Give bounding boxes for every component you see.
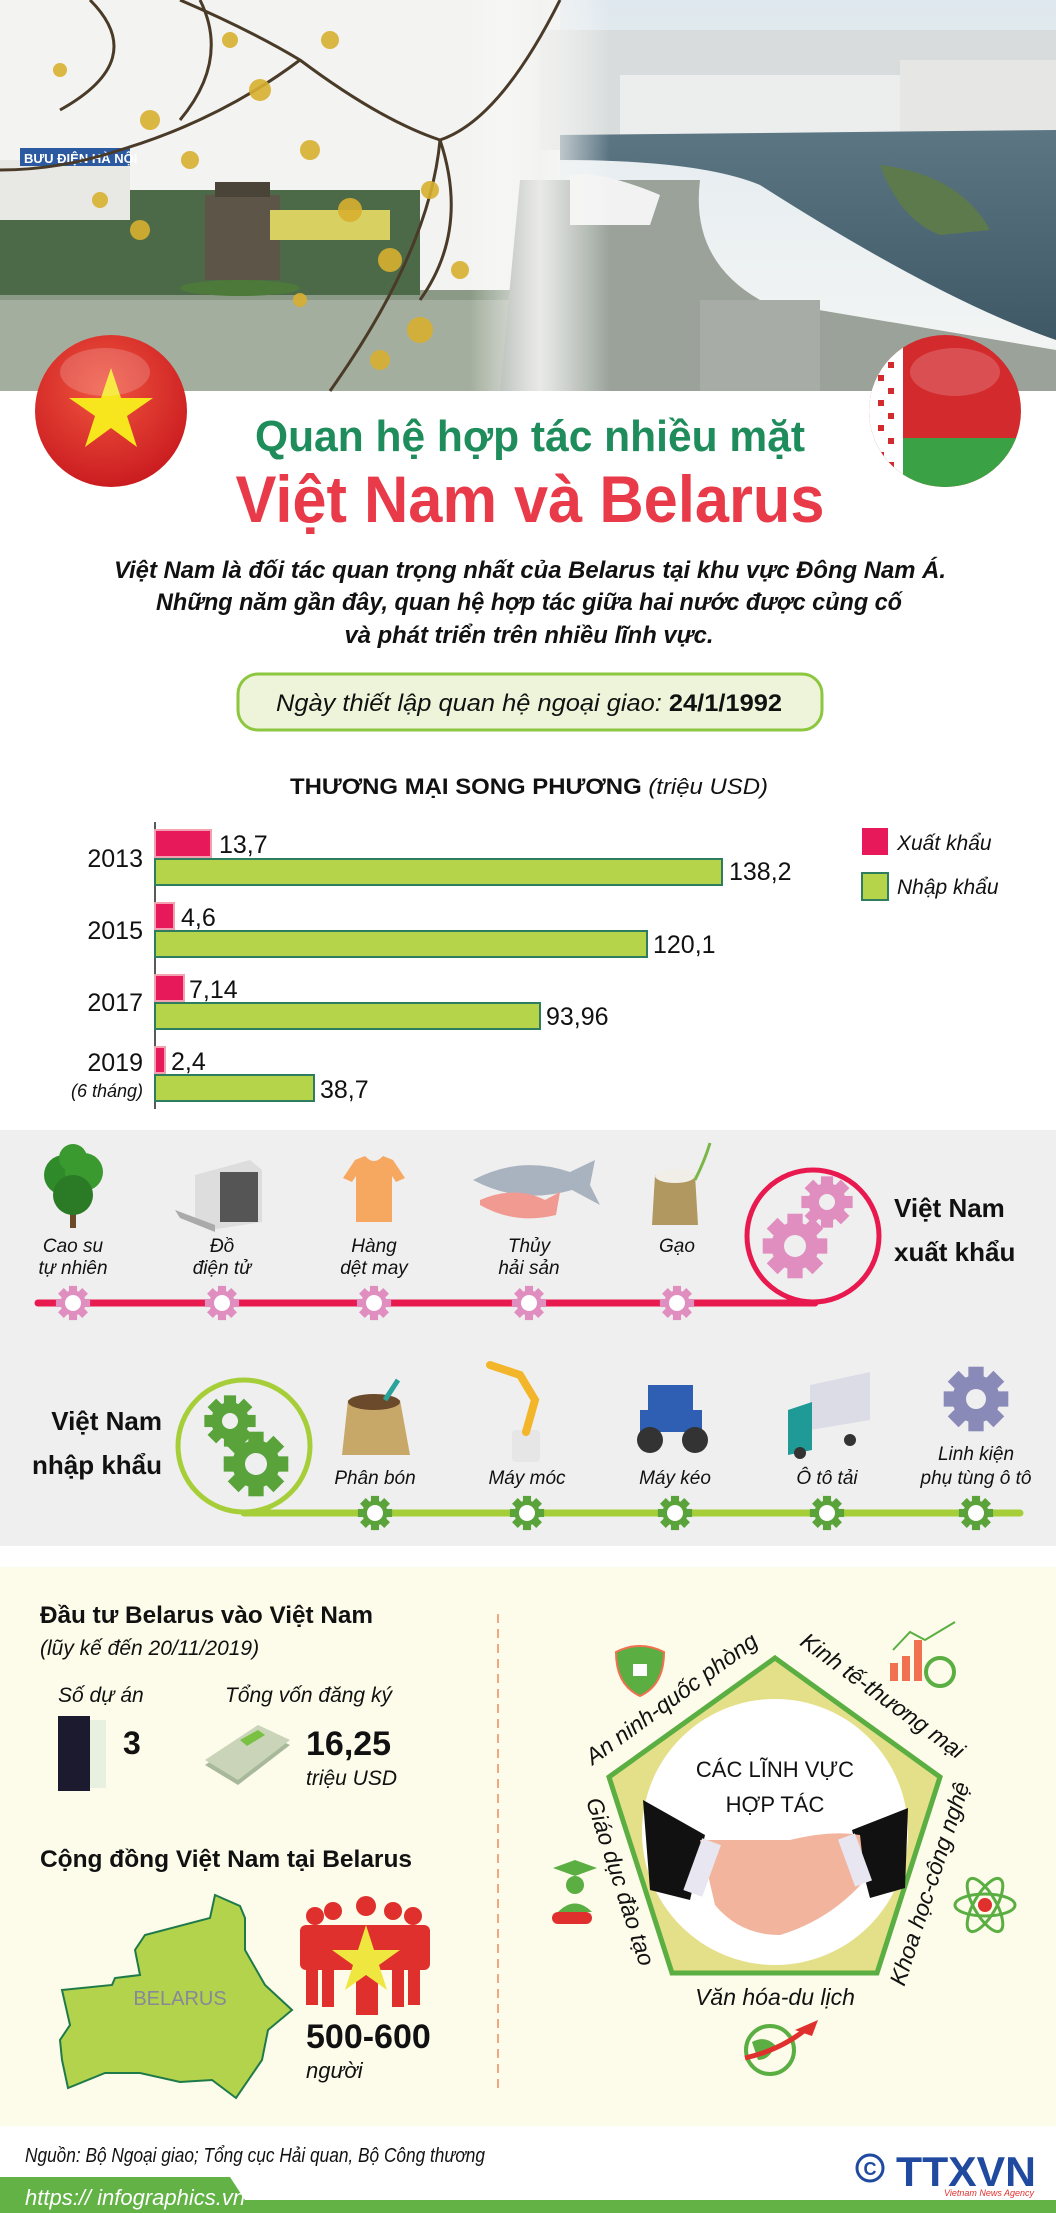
- export labels: Thủy: [508, 1236, 552, 1257]
- bar chart: 7,14: [189, 976, 238, 1004]
- import labels: phụ tùng ô tô: [920, 1468, 1032, 1489]
- export labels: Gạo: [659, 1236, 695, 1257]
- pentagon: cooperation fields: HỢP TÁC: [726, 1792, 824, 1817]
- stat: projects: Số dự án: [58, 1684, 144, 1707]
- icon: Belarus flag: [869, 335, 1021, 488]
- date box: Ngày thiết lập quan hệ ngoại giao: 24/1/1992: [276, 690, 782, 717]
- bar chart: 2019: [87, 1049, 143, 1077]
- export labels: Hàng: [351, 1236, 397, 1257]
- export labels: [38, 1236, 695, 1279]
- stat: community size: 500-600: [306, 2018, 431, 2056]
- pentagon: cooperation fields: CÁC LĨNH VỰC: [696, 1757, 854, 1782]
- bar chart: 93,96: [546, 1003, 609, 1031]
- legend: [862, 828, 999, 900]
- import labels: Máy kéo: [639, 1468, 711, 1489]
- bar chart: 13,7: [219, 831, 268, 859]
- bar chart: 2013: [87, 845, 143, 873]
- label: Kinh tế-thương mại: Kinh tế-thương mại: [796, 1627, 970, 1764]
- heading: Việt Nam nhập khẩu: nhập khẩu: [32, 1450, 162, 1480]
- stat: projects: 3: [123, 1725, 141, 1761]
- stat: capital: triệu USD: [306, 1767, 397, 1790]
- import line: [178, 1380, 1020, 1530]
- icon: graduate: [552, 1860, 597, 1924]
- pentagon: cooperation fields: [609, 1658, 940, 1973]
- title: Việt Nam và Belarus: [236, 462, 824, 536]
- import labels: Phân bón: [334, 1468, 416, 1489]
- header photo: BƯU ĐIỆN HÀ NỘI: [24, 151, 137, 166]
- import labels: [334, 1444, 1032, 1489]
- stat: community size: [306, 2018, 431, 2083]
- icon: robot arm: [490, 1365, 540, 1462]
- panel: trade goods: [0, 1130, 1056, 1546]
- intro text: và phát triển trên nhiều lĩnh vực.: [344, 622, 714, 649]
- export labels: điện tử: [193, 1258, 253, 1279]
- intro text: Việt Nam là đối tác quan trọng nhất của Belarus tại khu vực Đông Nam Á.: [114, 556, 946, 584]
- intro text: Những năm gần đây, quan hệ hợp tác giữa hai nước được củng cố: [156, 589, 903, 616]
- stat: projects: [58, 1684, 144, 1791]
- bar chart: 2015: [87, 917, 143, 945]
- label: Giáo dục đào tạo: Giáo dục đào tạo: [581, 1794, 660, 1969]
- icon: truck: [788, 1372, 870, 1459]
- heading: Việt Nam nhập khẩu: Việt Nam: [51, 1406, 162, 1436]
- label: An ninh-quốc phòng: An ninh-quốc phòng: [579, 1627, 762, 1771]
- import labels: Linh kiện: [938, 1444, 1014, 1465]
- icon: rice sack: [652, 1143, 710, 1225]
- bar chart: [71, 822, 792, 1109]
- stat: capital: Tổng vốn đăng ký: [225, 1684, 393, 1707]
- footer bar: https:// infographics.vn: [25, 2185, 245, 2210]
- export labels: tự nhiên: [38, 1258, 108, 1279]
- stat: capital: [205, 1684, 397, 1790]
- icon: atom: [955, 1874, 1015, 1936]
- chart title: THƯƠNG MẠI SONG PHƯƠNG (triệu USD): [290, 774, 768, 799]
- map: Belarus: [60, 1895, 292, 2098]
- icon: tractor: [637, 1385, 708, 1453]
- bar chart: (6 tháng): [71, 1081, 143, 1101]
- export labels: hải sản: [498, 1258, 560, 1279]
- icon: globe & plane: [745, 2020, 818, 2074]
- bar chart: 38,7: [320, 1076, 369, 1104]
- stat: community size: người: [306, 2058, 364, 2083]
- heading: investment: Đầu tư Belarus vào Việt Nam: [40, 1602, 373, 1629]
- icon: rubber tree: [44, 1144, 103, 1228]
- subheading: (lũy kế đến 20/11/2019): [40, 1637, 259, 1660]
- icon: garment: [343, 1156, 405, 1222]
- legend: Xuất khẩu: [896, 832, 992, 855]
- bar chart: 2,4: [171, 1048, 206, 1076]
- heading: Việt Nam xuất khẩu: xuất khẩu: [894, 1237, 1015, 1267]
- title: Quan hệ hợp tác nhiều mặt: [255, 412, 805, 461]
- export line: [38, 1170, 879, 1320]
- heading: Việt Nam xuất khẩu: Việt Nam: [894, 1193, 1005, 1223]
- export labels: Cao su: [43, 1236, 104, 1257]
- icon: shield: [616, 1646, 664, 1696]
- intro text: [114, 556, 946, 649]
- heading: community: Cộng đồng Việt Nam tại Belarus: [40, 1846, 412, 1873]
- heading: Việt Nam xuất khẩu: [894, 1193, 1015, 1267]
- label: Khoa học-công nghệ: Khoa học-công nghệ: [884, 1779, 975, 1988]
- export labels: Đồ: [210, 1236, 234, 1257]
- icon: people: [300, 1896, 430, 2015]
- heading: Việt Nam nhập khẩu: [32, 1406, 162, 1480]
- import labels: Ô tô tải: [796, 1467, 858, 1489]
- logo: TTXVN: C: [864, 2159, 876, 2179]
- date box: [238, 674, 822, 730]
- panel: investment & community: [0, 1567, 1056, 2126]
- label: Văn hóa-du lịch: Văn hóa-du lịch: [695, 1984, 855, 2010]
- map: Belarus: BELARUS: [133, 1988, 227, 2010]
- source note: Nguồn: Bộ Ngoại giao; Tổng cục Hải quan, Bộ Công thương: [25, 2145, 485, 2167]
- header photo: [0, 0, 1056, 391]
- bar chart: 2017: [87, 989, 143, 1017]
- export labels: dệt may: [340, 1258, 409, 1279]
- icon: electronics: [175, 1160, 262, 1232]
- icon: fertilizer: [342, 1380, 410, 1455]
- icon: Vietnam flag: [35, 335, 187, 487]
- footer bar: [0, 2177, 1056, 2213]
- icon: fish: [473, 1160, 600, 1218]
- legend: Nhập khẩu: [897, 876, 999, 899]
- handshake: [643, 1800, 908, 1935]
- bar chart: 120,1: [653, 931, 716, 959]
- import labels: Máy móc: [488, 1468, 566, 1489]
- logo: TTXVN: TTXVN: [896, 2148, 1036, 2195]
- bar chart: 138,2: [729, 858, 792, 886]
- title: [236, 412, 824, 536]
- logo: TTXVN: Vietnam News Agency: [944, 2188, 1035, 2198]
- bar chart: 4,6: [181, 904, 216, 932]
- icon: gear part: [944, 1367, 1008, 1431]
- stat: capital: 16,25: [306, 1725, 391, 1763]
- icon: chart: [890, 1622, 955, 1686]
